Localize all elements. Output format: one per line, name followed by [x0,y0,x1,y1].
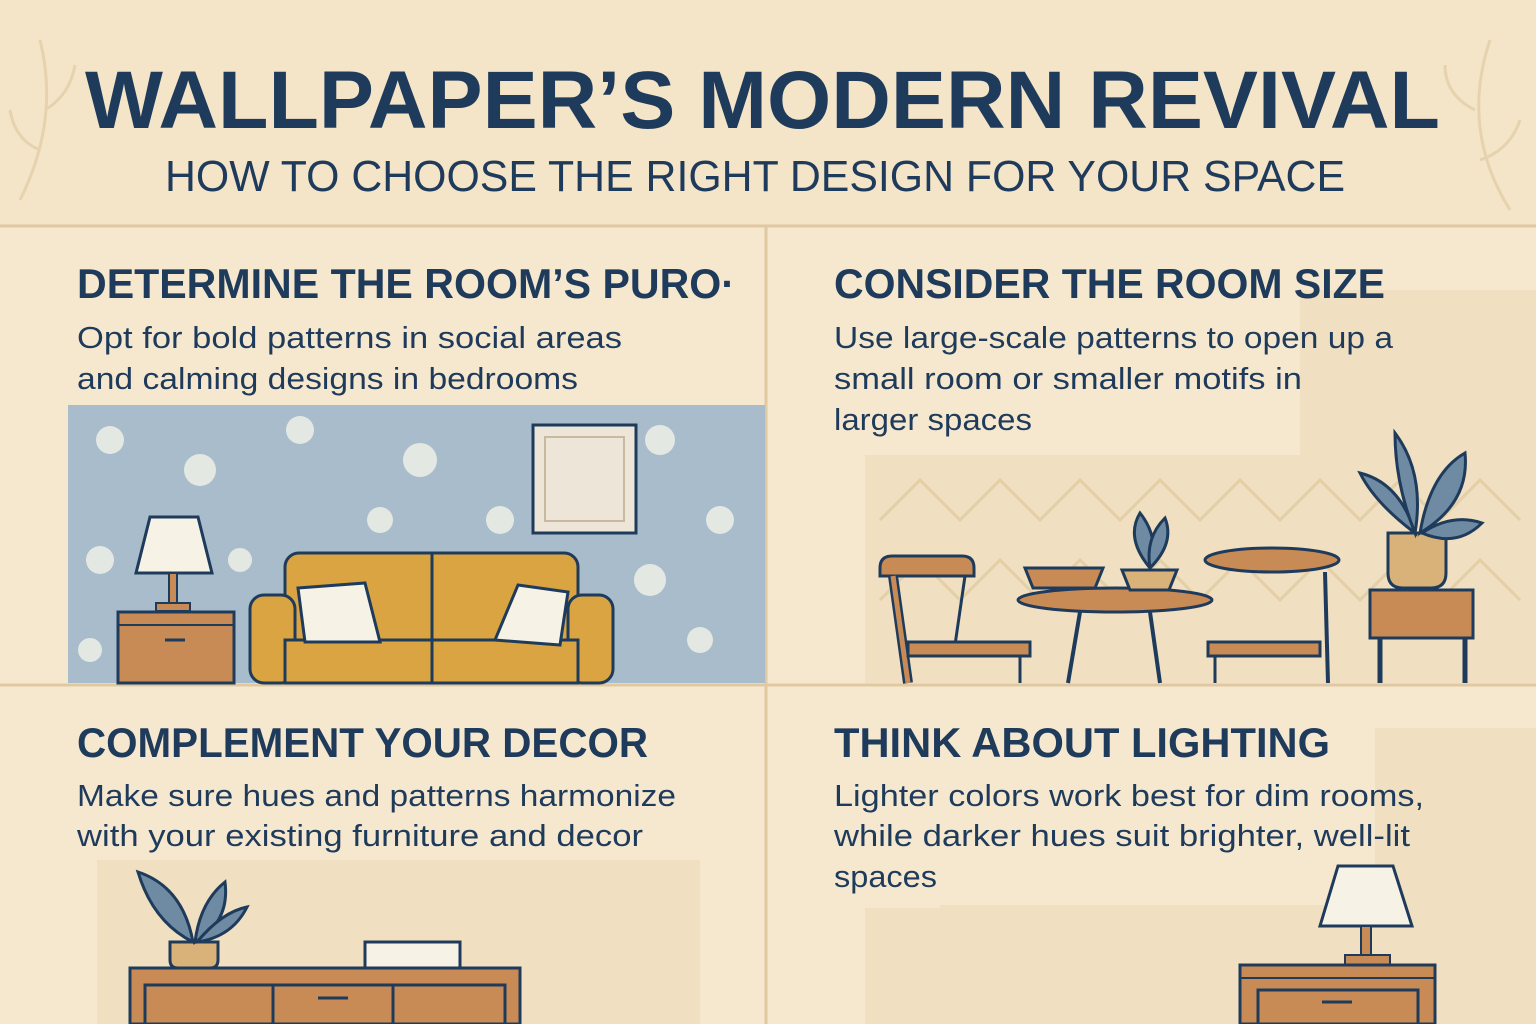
panel: room size [834,260,1536,683]
heading: THINK ABOUT LIGHTING [834,719,1330,766]
illustration: living room [68,405,765,683]
heading: CONSIDER THE ROOM SIZE [834,260,1385,307]
text block: Lighter colors work best for dim rooms, [834,778,1424,813]
panel: room purpose [68,260,765,683]
text block [76,778,676,853]
text block: with your existing furniture and decor [76,818,643,853]
illustration: lamp [865,728,1536,1024]
text block: and calming designs in bedrooms [77,361,578,396]
heading: DETERMINE THE ROOM’S PURO· [77,260,735,307]
text block: spaces [834,859,937,894]
text block: larger spaces [834,402,1032,437]
panel: complement decor [76,719,700,1024]
text block: Make sure hues and patterns harmonize [77,778,676,813]
text block: small room or smaller motifs in [834,361,1302,396]
subtitle: HOW TO CHOOSE THE RIGHT DESIGN FOR YOUR SPACE [165,152,1345,201]
panel: lighting [833,719,1536,1024]
text block [833,778,1424,894]
title: WALLPAPER’S MODERN REVIVAL [85,55,1440,146]
text block: Use large-scale patterns to open up a [834,320,1394,355]
text block: Opt for bold patterns in social areas [77,320,622,355]
text block [834,320,1394,437]
illustration: dining [865,290,1536,683]
text block: while darker hues suit brighter, well-lit [833,818,1410,853]
text block [77,320,622,396]
heading: COMPLEMENT YOUR DECOR [77,719,648,766]
illustration: sideboard [97,860,700,1024]
